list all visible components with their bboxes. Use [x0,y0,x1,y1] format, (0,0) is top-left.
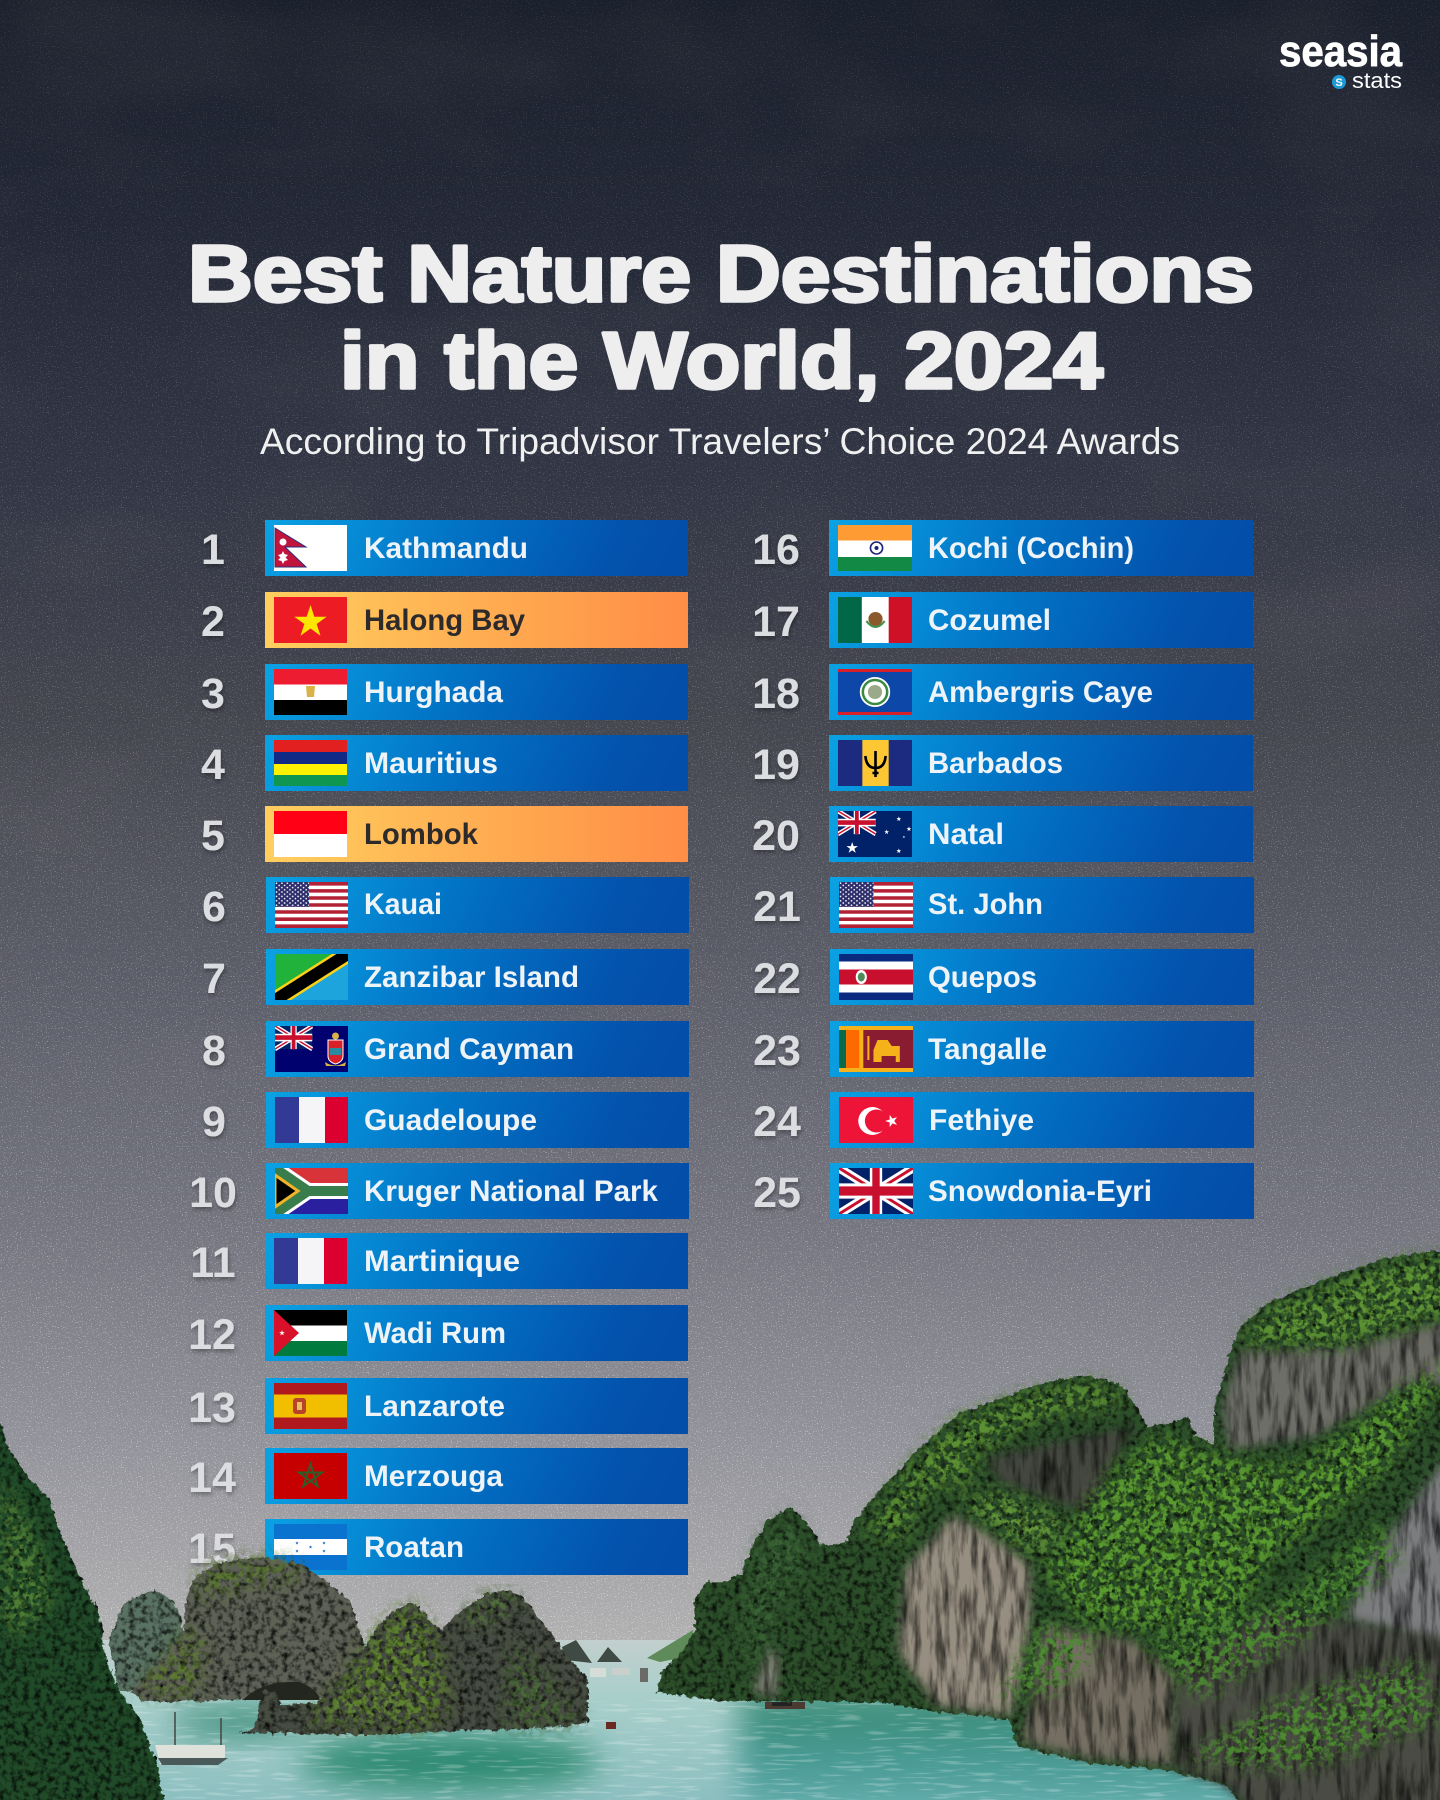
right karst massif [657,1245,1440,1800]
subtitle: According to Tripadvisor Travelers’ Choice 2024 Awards [260,421,1180,462]
background: soft clouds [0,0,1440,1100]
rank 4: 4 [201,741,225,789]
flag: Sri Lanka [839,1026,913,1072]
row 18 [752,664,1253,720]
flag: Barbados [838,740,912,786]
bar [265,520,688,576]
row 8 [202,1021,689,1077]
bar [265,1305,688,1361]
flag: Nepal [274,525,347,571]
flag: Costa Rica [839,954,913,1000]
left column: ranks 1 to 15 [188,520,689,1575]
water [100,1640,1440,1800]
rank 8: 8 [202,1027,226,1075]
rank 7: 7 [202,955,226,1003]
row 6 [202,877,689,933]
rank 24: 24 [753,1098,801,1146]
bar [830,1163,1254,1219]
centre islands [239,1590,588,1735]
row 5 [201,806,688,862]
landscape: Halong Bay karst scenery [0,1245,1440,1800]
bar [266,949,689,1005]
row 2 [201,592,688,648]
row 20 [752,806,1253,862]
label: Mauritius [364,747,498,780]
rank 11: 11 [190,1239,236,1287]
rank 13: 13 [188,1384,236,1432]
row 4 [201,735,688,791]
label: Natal [928,818,1004,851]
logo: seasia stats [1279,27,1402,93]
flag: Turkey [839,1097,913,1143]
row 22 [753,949,1254,1005]
title [188,229,1254,405]
label: Kathmandu [364,532,528,565]
label: Quepos [928,961,1037,994]
label: Lanzarote [364,1390,505,1423]
rank 19: 19 [752,741,800,789]
rank 2: 2 [201,598,225,646]
label: Martinique [364,1245,520,1278]
rank 6: 6 [202,883,226,931]
rank 25: 25 [753,1169,801,1217]
right small hill [647,1630,695,1662]
bar [829,735,1253,791]
row 19 [752,735,1253,791]
bar [266,1021,689,1077]
boats [155,1668,805,1765]
flag: Australia [838,811,912,857]
label: Kauai [364,888,442,921]
distant rocks [562,1640,622,1663]
bar [830,877,1254,933]
rank 3: 3 [201,670,225,718]
rank 5: 5 [201,812,225,860]
title: in the World, 2024 [340,316,1104,405]
bar [265,664,688,720]
bar [266,1092,689,1148]
rank 21: 21 [753,883,801,931]
flag: Honduras [274,1524,347,1570]
row 3 [201,664,688,720]
label: Lombok [364,818,478,851]
label: St. John [928,888,1043,921]
label: Kruger National Park [364,1175,658,1208]
row 15 [188,1519,688,1575]
bar [829,592,1253,648]
rank 1: 1 [201,526,225,574]
logo: seasia stats: stats [1352,68,1402,93]
bar [265,1448,688,1504]
bar [829,806,1253,862]
bar [265,735,688,791]
row 12 [188,1305,688,1361]
rank 14: 14 [188,1454,236,1502]
rank 20: 20 [752,812,800,860]
flag: France [274,1238,347,1284]
row 1 [201,520,688,576]
rank 12: 12 [188,1311,236,1359]
row 9 [202,1092,689,1148]
rank 16: 16 [752,526,800,574]
title: Best Nature Destinations [188,229,1254,318]
logo: seasia stats: S [1335,77,1343,89]
flag: USA [839,882,913,928]
bar [266,877,689,933]
bar [830,1021,1254,1077]
flag: Morocco [274,1453,347,1499]
row 25 [753,1163,1254,1219]
label: Cozumel [928,604,1051,637]
label: Ambergris Caye [928,676,1153,709]
label: Merzouga [364,1460,503,1493]
flag: Jordan [274,1310,347,1356]
flag: France [275,1097,348,1143]
flag: Egypt [274,669,347,715]
label: Wadi Rum [364,1317,506,1350]
bar [265,1233,688,1289]
row 13 [188,1378,688,1434]
label: Roatan [364,1531,464,1564]
rank 23: 23 [753,1027,801,1075]
row 14 [188,1448,688,1504]
flag: United Kingdom [839,1168,913,1214]
far left hill [108,1589,185,1690]
rank 15: 15 [188,1525,236,1573]
flag: Spain [274,1383,347,1429]
flag: Mauritius [274,740,347,786]
right column: ranks 16 to 25 [752,520,1254,1219]
label: Fethiye [929,1104,1034,1137]
flag: USA [275,882,348,928]
rock faces [752,1318,1440,1800]
label: Tangalle [928,1033,1047,1066]
row 21 [753,877,1254,933]
left foreground cliff [0,1400,170,1800]
label: Halong Bay [364,604,525,637]
flag: South Africa [275,1168,348,1214]
label: Hurghada [364,676,503,709]
rank 9: 9 [202,1098,226,1146]
bar [265,806,688,862]
row 17 [752,592,1253,648]
flag: Vietnam [274,597,347,643]
big left hill [131,1557,363,1702]
bar [829,664,1253,720]
flag: India [838,525,912,571]
row 11 [190,1233,688,1289]
flag: Tanzania [275,954,348,1000]
flag: Cayman Islands [275,1026,348,1072]
rank 17: 17 [752,598,800,646]
label: Grand Cayman [364,1033,574,1066]
rank 18: 18 [752,670,800,718]
rank 22: 22 [753,955,801,1003]
label: Guadeloupe [364,1104,537,1137]
bar [830,949,1254,1005]
bar [830,1092,1254,1148]
bar [265,592,688,648]
row 16 [752,520,1253,576]
row 7 [202,949,689,1005]
flag: Indonesia [274,811,347,857]
bar [829,520,1253,576]
label: Zanzibar Island [364,961,579,994]
row 10 [189,1163,689,1219]
rank 10: 10 [189,1169,237,1217]
label: Snowdonia-Eyri [928,1175,1152,1208]
logo: seasia stats: seasia [1279,27,1402,76]
flag: Mexico [838,597,912,643]
foliage [738,1250,1440,1770]
flag: Belize [838,669,912,715]
label: Barbados [928,747,1063,780]
bar [265,1378,688,1434]
row 24 [753,1092,1254,1148]
bar [265,1519,688,1575]
label: Kochi (Cochin) [928,532,1134,565]
bar [266,1163,689,1219]
row 23 [753,1021,1254,1077]
